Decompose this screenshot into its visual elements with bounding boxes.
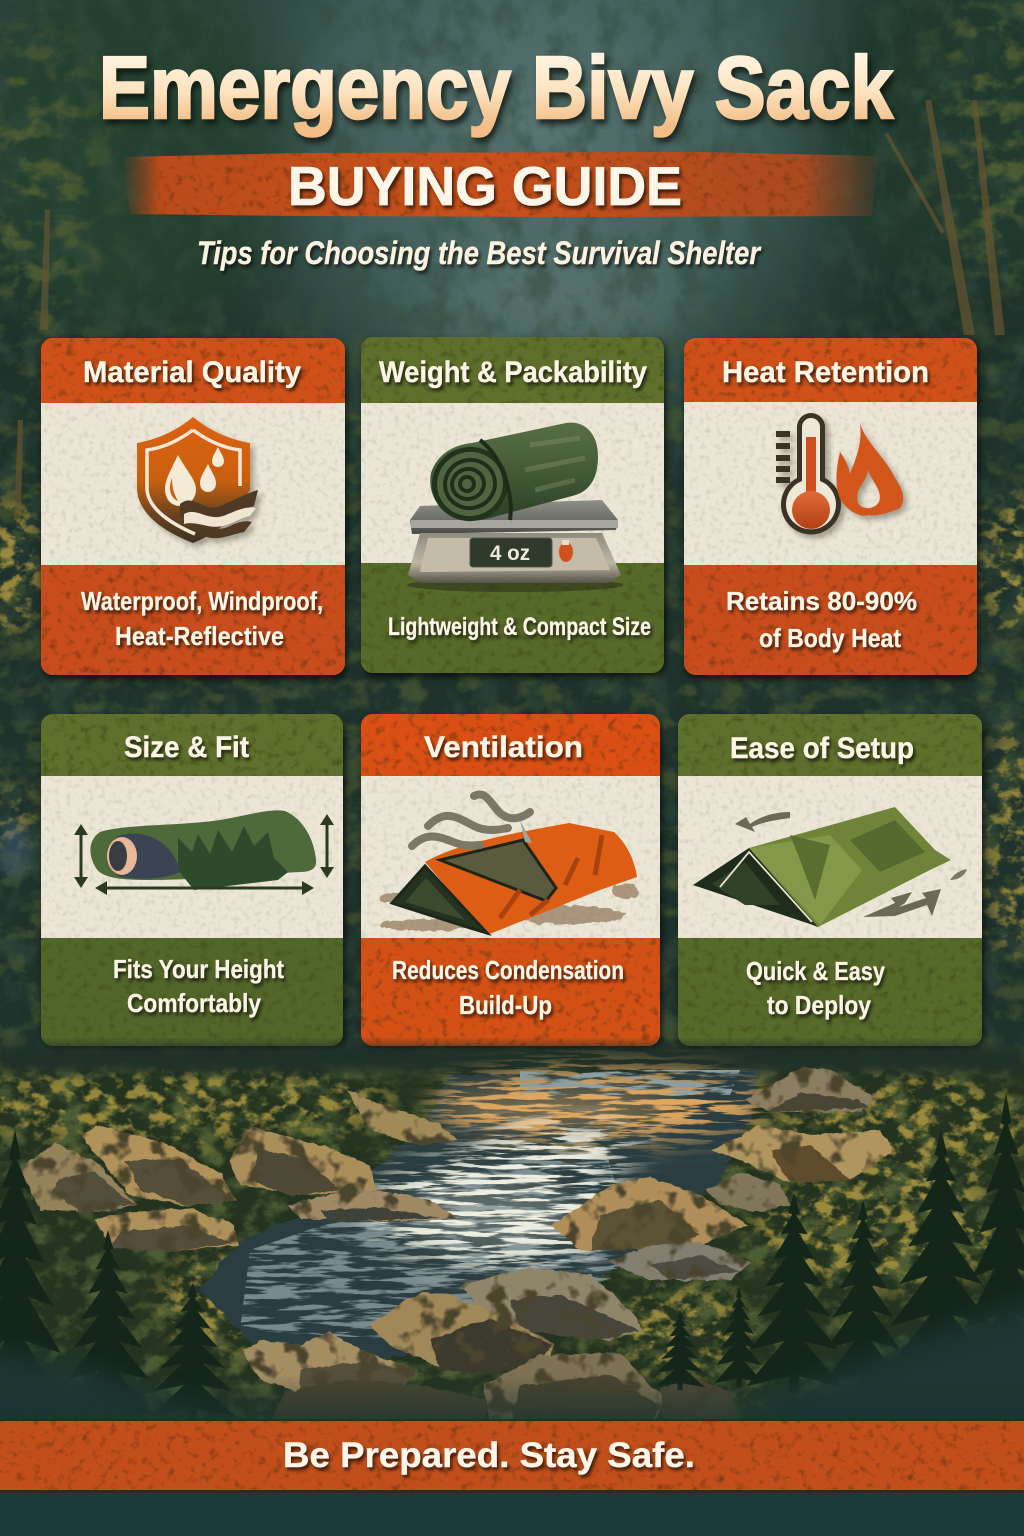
heading: Ease of Setup <box>730 732 914 765</box>
panel: weight and packability <box>361 337 664 673</box>
river water <box>200 1050 787 1360</box>
icon: sleeping bag with size arrows <box>74 810 334 895</box>
footer banner: Be Prepared. Stay Safe. <box>283 1436 695 1475</box>
title: Emergency Bivy Sack <box>99 38 894 137</box>
caption: Comfortably <box>127 988 261 1018</box>
panel: ventilation <box>361 714 660 1046</box>
caption: to Deploy <box>767 990 871 1020</box>
caption: Build-Up <box>459 990 552 1020</box>
icon: bivy roll on a digital scale showing 4 oz <box>407 423 623 592</box>
caption: Heat-Reflective <box>115 621 284 651</box>
icon: quick-pitch green tent <box>693 807 967 927</box>
banner: buying guide: BUYING GUIDE <box>288 155 682 217</box>
caption: Fits Your Height <box>113 954 284 984</box>
footer banner <box>0 1419 1024 1493</box>
boulders <box>20 1068 895 1430</box>
panel: ease of setup <box>678 714 982 1046</box>
caption <box>746 956 885 1020</box>
heading: Size & Fit <box>124 731 249 764</box>
conifers <box>0 1093 1024 1421</box>
scene: river, boulders and conifers <box>0 1046 1024 1440</box>
footer background <box>0 1490 1024 1536</box>
caption: Quick & Easy <box>746 956 885 986</box>
heading: Weight & Packability <box>379 356 647 389</box>
banner: buying guide <box>122 152 878 217</box>
icon: ventilated orange bivy tent <box>379 794 639 935</box>
subtitle: Tips for Choosing the Best Survival Shelter <box>197 235 761 271</box>
caption <box>392 955 624 1020</box>
tree trunks <box>14 100 1005 520</box>
foliage banks <box>0 1046 1024 1421</box>
icon: flame <box>836 418 903 516</box>
caption <box>81 586 323 651</box>
caption: of Body Heat <box>759 623 901 653</box>
caption <box>113 954 284 1018</box>
caption <box>726 586 917 653</box>
heading: Heat Retention <box>722 356 929 389</box>
panel: heat retention <box>684 338 977 675</box>
heading: Material Quality <box>83 356 301 389</box>
caption: Reduces Condensation <box>392 955 624 985</box>
bottom fade <box>0 1290 1024 1440</box>
panel: size and fit <box>41 714 343 1046</box>
caption: Retains 80-90% <box>726 586 917 616</box>
arrows <box>74 814 334 895</box>
panel: material quality <box>41 338 345 675</box>
caption: Waterproof, Windproof, <box>81 586 323 616</box>
background: misty forest <box>0 0 1024 1056</box>
scale readout: 4 oz <box>490 542 530 565</box>
icon: thermometer <box>776 413 841 535</box>
heading: Ventilation <box>424 731 583 764</box>
icon: shield with water drops and waves <box>137 417 258 543</box>
caption: Lightweight & Compact Size <box>388 613 651 641</box>
